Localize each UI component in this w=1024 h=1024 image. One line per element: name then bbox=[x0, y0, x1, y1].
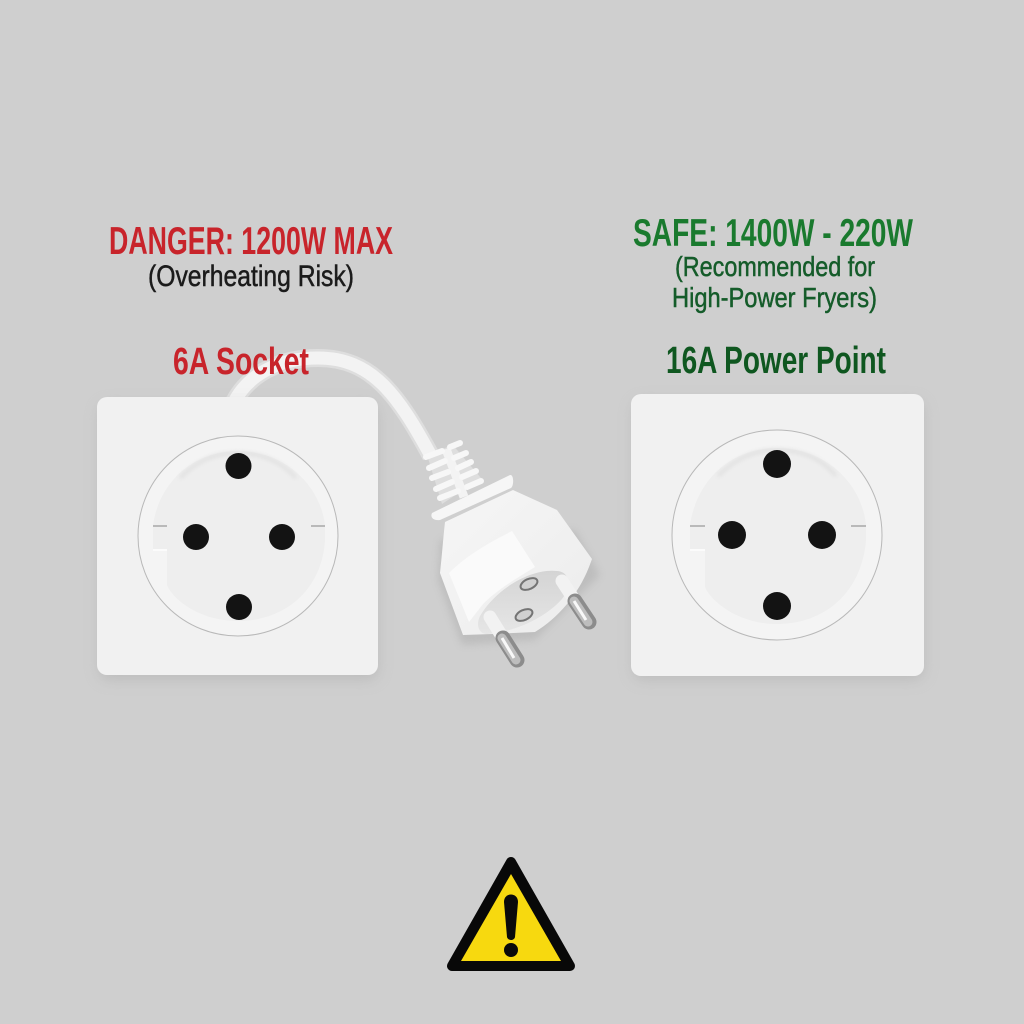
exclamation mark bbox=[504, 894, 518, 957]
strain relief bbox=[426, 443, 481, 504]
label: 16A power point: 16A Power Point bbox=[666, 340, 886, 382]
socket ring bbox=[138, 436, 338, 636]
plug contacts bbox=[514, 576, 539, 623]
subheading: overheating risk: (Overheating Risk) bbox=[148, 260, 354, 293]
icon: warning triangle bbox=[452, 862, 570, 966]
panel: 6A socket bbox=[97, 397, 378, 680]
yellow field bbox=[461, 874, 561, 961]
plug body bbox=[440, 490, 592, 635]
faceplate bbox=[97, 397, 378, 675]
faceplate bbox=[631, 394, 924, 676]
socket holes bbox=[183, 453, 295, 620]
socket holes bbox=[718, 450, 836, 620]
icon: plug bbox=[426, 443, 600, 660]
socket recess bbox=[690, 448, 866, 624]
heading: safe: SAFE: 1400W - 220W bbox=[633, 212, 913, 255]
plug face bbox=[478, 571, 568, 634]
panel: 16A power point bbox=[631, 394, 924, 680]
heading: danger: DANGER: 1200W MAX bbox=[109, 220, 393, 263]
plug pin left bbox=[490, 617, 517, 660]
socket ring bbox=[672, 430, 882, 640]
subheading: recommended: (Recommended for bbox=[675, 251, 875, 282]
plug grip panel bbox=[449, 531, 535, 622]
label: 6A socket: 6A Socket bbox=[173, 341, 309, 383]
socket recess bbox=[153, 451, 325, 621]
power cord bbox=[234, 358, 431, 456]
subheading: high-power fryers: High-Power Fryers) bbox=[672, 282, 877, 313]
plug pin right bbox=[562, 581, 589, 622]
plug collar bbox=[431, 475, 513, 520]
